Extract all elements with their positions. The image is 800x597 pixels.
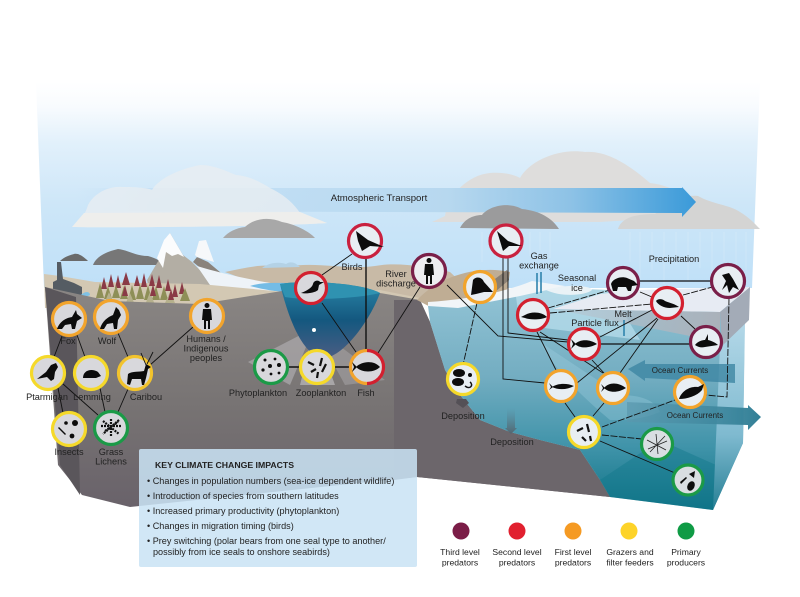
legend: first level predators: First level xyxy=(555,547,591,557)
lake light cones xyxy=(248,328,385,385)
cloud: grey mountains xyxy=(93,249,164,265)
node: grazers zooplankton xyxy=(568,416,600,448)
lake xyxy=(280,282,380,358)
sea-ice sheet xyxy=(553,287,750,346)
legend: third level predators: Third level xyxy=(440,547,480,557)
node: birds xyxy=(348,224,384,258)
rain: centre cloud xyxy=(482,232,550,262)
left land block front xyxy=(45,287,610,507)
node: whale xyxy=(674,376,706,408)
glacier xyxy=(197,266,285,296)
forest xyxy=(96,272,190,305)
seasonal ice floe xyxy=(546,286,592,295)
foreground land surface xyxy=(44,274,420,308)
label: fox: Fox xyxy=(60,336,76,346)
legend: second level predators xyxy=(492,522,542,568)
legend: primary producers: producers xyxy=(667,558,705,568)
label: phytoplankton: Phytoplankton xyxy=(229,388,287,398)
label: humans and indigenous peoples: Indigenous xyxy=(184,344,229,354)
label: grass and lichens: Grass xyxy=(99,447,123,457)
ocean current arrow: bottom xyxy=(627,402,761,430)
node: seal swimming xyxy=(518,300,548,330)
label: ptarmigan: Ptarmigan xyxy=(26,392,68,402)
legend: grazers and filter feeders: Grazers and xyxy=(606,547,654,557)
deposition arrow: short xyxy=(456,399,469,408)
node: grass and lichens xyxy=(94,412,128,444)
deep teal wedge xyxy=(600,440,716,510)
node: insects xyxy=(52,412,86,446)
label: caribou: Caribou xyxy=(130,392,162,402)
bullet list: • Prey switching (polar bears from one seal type to another/ xyxy=(147,536,386,546)
rain: right side precipitation xyxy=(630,232,746,284)
legend: second level predators: predators xyxy=(499,558,535,568)
cloud: grey small xyxy=(60,254,88,261)
bullet list: • Changes in migration timing (birds) xyxy=(147,521,294,531)
label: particle flux: Particle flux xyxy=(571,318,619,328)
node: first level fish right xyxy=(598,372,628,404)
deposition arrow: long xyxy=(505,408,517,434)
label: gas exchange: exchange xyxy=(519,260,559,270)
node: lemming xyxy=(74,356,108,390)
factory xyxy=(53,262,90,299)
label: zooplankton: Zooplankton xyxy=(296,388,346,398)
label: seasonal ice: ice xyxy=(571,283,583,293)
label: river discharge: discharge xyxy=(376,278,416,288)
gas exchange arrows xyxy=(537,272,541,294)
label: insects: Insects xyxy=(54,447,84,457)
node: wolf xyxy=(94,300,128,334)
cloud: large pale left xyxy=(72,165,327,227)
label: seasonal ice: Seasonal xyxy=(558,273,596,283)
legend: grazers and filter feeders xyxy=(606,522,654,568)
node: producer plankton xyxy=(673,465,703,495)
node: mollusc xyxy=(448,364,478,394)
sea right side face xyxy=(713,322,745,510)
label: fish: Fish xyxy=(357,388,375,398)
river discharge coast land xyxy=(417,270,510,312)
node: ptarmigan xyxy=(32,356,64,390)
node: polar bear xyxy=(608,268,638,298)
node: human right xyxy=(412,254,446,288)
legend: first level predators xyxy=(555,522,591,568)
bullet list: • Introduction of species from southern latitudes xyxy=(147,491,339,501)
label: deposition shelf: Deposition xyxy=(441,411,485,421)
legend: grazers and filter feeders: filter feeders xyxy=(606,558,654,568)
shore snow xyxy=(428,281,565,308)
cloud: grey centre right xyxy=(460,205,559,229)
legend: second level predators: Second level xyxy=(492,547,542,557)
bullet list: possibly from ice seals to onshore seabirds) xyxy=(153,547,330,557)
node: phytoplankton xyxy=(254,350,288,384)
label: precipitation: Precipitation xyxy=(649,254,699,264)
node: producer algae xyxy=(642,428,672,460)
glacier meltwater xyxy=(250,283,288,292)
node: human left xyxy=(190,300,224,332)
cloud: grey centre xyxy=(223,219,315,238)
atmospheric transport arrow xyxy=(75,187,696,217)
node: first level fish left xyxy=(546,370,576,402)
upper bright water xyxy=(515,290,640,340)
left land block side face xyxy=(45,287,80,495)
label: ocean currents bottom: Ocean Currents xyxy=(667,411,723,420)
mountains xyxy=(147,233,227,293)
legend: first level predators: predators xyxy=(555,558,591,568)
legend: primary producers xyxy=(667,522,705,568)
node: orca xyxy=(690,326,722,358)
atmospheric transport label: Atmospheric Transport xyxy=(331,193,428,204)
ocean current arrow: top xyxy=(628,360,735,383)
cloud: right rain cloud xyxy=(618,196,760,229)
node: ice seal xyxy=(652,288,682,318)
distant hills xyxy=(225,264,480,300)
label: birds: Birds xyxy=(342,262,363,272)
node: zooplankton xyxy=(300,350,334,384)
legend: primary producers: Primary xyxy=(671,547,701,557)
label: wolf: Wolf xyxy=(98,336,117,346)
label: humans and indigenous peoples: peoples xyxy=(190,353,222,363)
bullet list: • Changes in population numbers (sea-ice dependent wildlife) xyxy=(147,476,394,486)
label: grass and lichens: Lichens xyxy=(95,456,127,466)
label: deposition deep: Deposition xyxy=(490,437,534,447)
label: melt: Melt xyxy=(614,309,632,319)
node: loon xyxy=(296,272,326,304)
sky background xyxy=(36,82,760,288)
node: bird right xyxy=(490,225,522,257)
sea water xyxy=(428,288,745,510)
label: humans and indigenous peoples: Humans / xyxy=(186,334,226,344)
right-hand dark rock slope xyxy=(394,300,610,497)
cloud: large pale right xyxy=(432,151,698,222)
rocky headland xyxy=(480,270,509,292)
lighter water plane xyxy=(540,342,660,420)
node: seabird xyxy=(712,264,744,298)
bullet list: • Increased primary productivity (phytoplankton) xyxy=(147,506,339,516)
legend xyxy=(440,522,705,568)
heading: key climate change impacts: KEY CLIMATE CHANGE IMPACTS xyxy=(155,460,294,470)
node: fish (two trophic levels) xyxy=(350,350,384,384)
legend: third level predators: predators xyxy=(442,558,478,568)
node: fox xyxy=(52,302,86,336)
node: second level fish xyxy=(568,328,600,360)
label: river discharge: River xyxy=(385,269,407,279)
cloud: pale left base band xyxy=(72,212,327,227)
legend: third level predators xyxy=(440,522,480,568)
food web lines xyxy=(54,254,729,473)
distant blue hills xyxy=(262,262,300,268)
label: ocean currents top: Ocean Currents xyxy=(652,366,708,375)
bullet list xyxy=(147,476,394,557)
label: lemming: Lemming xyxy=(73,392,111,402)
label: gas exchange: Gas xyxy=(531,251,547,261)
melt arrow xyxy=(623,320,625,336)
node: caribou xyxy=(118,352,153,390)
node: walrus xyxy=(464,272,496,302)
panel: key climate change impacts xyxy=(139,449,417,567)
